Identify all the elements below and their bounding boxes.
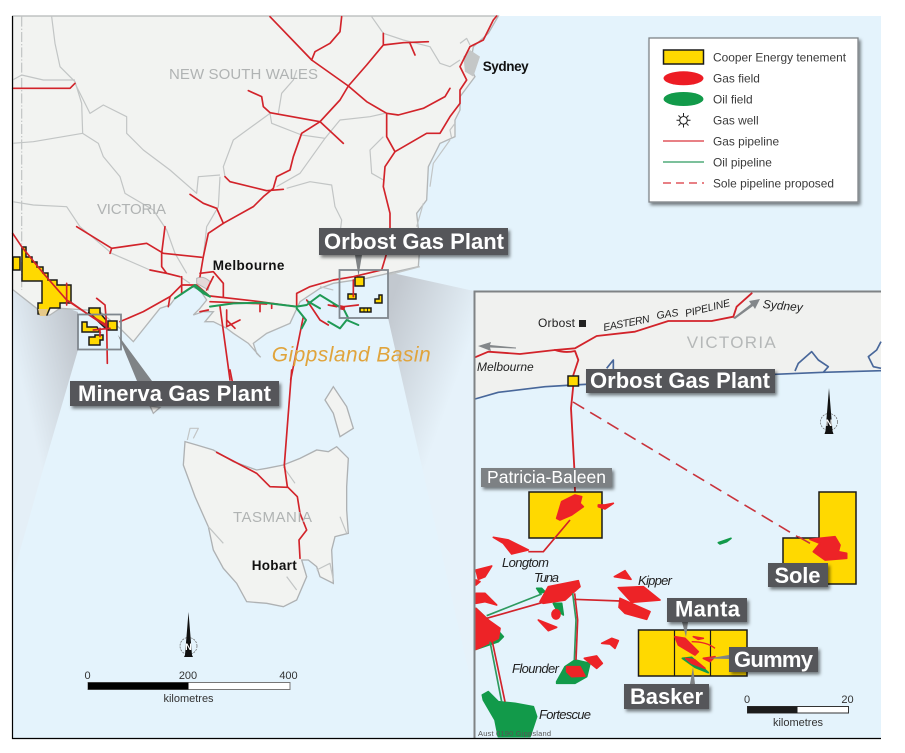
scale bar: inset: 0: [744, 694, 750, 706]
legend: gas well: Gas well: [713, 114, 759, 128]
legend: oil field: Oil field: [713, 92, 753, 106]
Orbost plant marker: [568, 376, 578, 386]
legend: gas field: [664, 71, 760, 86]
compass: inset: N: [826, 418, 832, 428]
tenements: Orbost area: [348, 277, 382, 312]
state label: Tasmania: TASMANIA: [233, 509, 312, 526]
credit text: Aust 0190 Gippsland: [478, 729, 551, 738]
pointer: Gummy: [708, 655, 729, 659]
label: Minerva Gas Plant: Minerva Gas Plant: [78, 381, 272, 406]
state label: Victoria inset: VICTORIA: [687, 333, 776, 352]
field names: Tuna: [534, 570, 559, 585]
tenement blocks: inset: [529, 492, 856, 676]
scale bar: main map: 400: [279, 670, 298, 682]
label: Sole: Sole: [774, 563, 820, 588]
Orbost town marker: Orbost: [538, 316, 576, 330]
label: Basker: Basker: [630, 684, 703, 709]
label: Gummy: Gummy: [734, 647, 814, 672]
compass: main map: [180, 612, 197, 657]
pipeline name: PIPELINE: [684, 297, 732, 320]
scale bar: main map: 0: [84, 670, 91, 682]
field names: Kipper: [638, 573, 673, 588]
legend: oil pipeline: [663, 156, 772, 170]
city: Melbourne: Melbourne: [213, 258, 285, 273]
label: Orbost Gas Plant: Orbost Gas Plant: [324, 229, 505, 254]
legend: Sole pipeline proposed: Sole pipeline proposed: [713, 176, 834, 190]
legend: oil field: [664, 92, 753, 106]
inset land: [475, 291, 881, 399]
field names: [502, 555, 673, 722]
pipeline name: GAS: [656, 307, 679, 322]
legend: gas pipeline: Gas pipeline: [713, 134, 779, 148]
mainland land mass: [13, 16, 498, 357]
field names: Fortescue: [539, 707, 591, 722]
tenements: Minerva area: [82, 308, 117, 345]
compass: inset: [820, 388, 838, 434]
callout box: Orbost: [340, 270, 388, 318]
arrow to Melbourne: [478, 342, 516, 351]
basin label: Gippsland Basin: Gippsland Basin: [272, 344, 431, 367]
city: Hobart: Hobart: [252, 558, 297, 573]
scale bar: inset: 20: [841, 694, 854, 706]
pipeline name: [602, 297, 732, 334]
gas and oil pipelines: main map: [13, 16, 497, 380]
scale bar: main map: 200: [179, 670, 197, 682]
label: Sydney direction: Sydney: [762, 297, 804, 315]
legend: oil pipeline: Oil pipeline: [713, 156, 772, 170]
pointer: Orbost: [355, 255, 362, 276]
state label: Victoria: VICTORIA: [97, 201, 166, 218]
pipelines: Bass Strait to Tasmania: [217, 370, 307, 558]
pointer: Basker: [690, 667, 695, 684]
inset coastline: [475, 342, 881, 399]
label: Patricia-Baleen: Patricia-Baleen: [487, 467, 606, 487]
pointer: Manta: [682, 622, 688, 637]
pointer: Minerva: [118, 335, 152, 381]
field names: Flounder: [512, 661, 560, 676]
legend: tenement: Cooper Energy tenement: [713, 50, 847, 64]
label: Orbost Gas Plant inset: Orbost Gas Plant: [590, 368, 771, 393]
legend: gas pipeline: [663, 134, 779, 148]
pipeline name: EASTERN: [602, 313, 651, 334]
callout cone: Minerva zoom: [13, 288, 78, 572]
inset proposed Sole pipeline: [573, 402, 808, 543]
compass: main map: N: [185, 642, 192, 652]
scale bar: main map: kilometres: [163, 693, 214, 705]
label: Melbourne direction: Melbourne: [477, 360, 534, 374]
callout box: Minerva: [78, 314, 121, 350]
label: Manta: Manta: [675, 596, 741, 622]
field names: Longtom: [502, 555, 549, 570]
tenements: west Otway block: [13, 247, 71, 316]
scale bar: inset: [744, 694, 854, 729]
state label: New South Wales: NEW SOUTH WALES: [169, 66, 318, 83]
scale bar: main map: [84, 670, 298, 705]
legend: [649, 38, 858, 202]
arrow to Sydney: [733, 299, 760, 319]
inset pipeline: Eastern Gas Pipeline: [475, 293, 752, 492]
scale bar: inset: kilometres: [773, 717, 824, 729]
city: Sydney: Sydney: [483, 59, 529, 74]
Tasmania and Bass Strait islands: [150, 387, 353, 607]
legend: gas well: [676, 113, 759, 128]
legend: gas field: Gas field: [713, 72, 760, 86]
inset border: [474, 292, 881, 738]
gas fields: Patricia-Baleen: [557, 495, 613, 520]
callout cone: Orbost zoom: [388, 272, 474, 690]
panel: Orbost inset map: [474, 291, 881, 738]
gas and oil fields: inset: [476, 520, 847, 737]
